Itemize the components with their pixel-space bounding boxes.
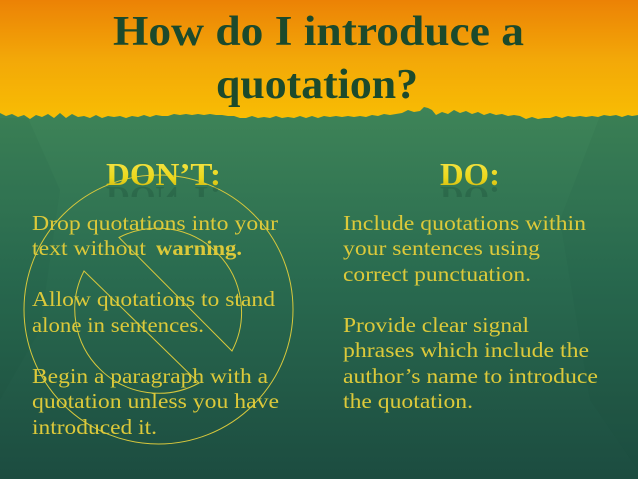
text block: do list: author’s name to introduce xyxy=(343,364,598,388)
text block: do list: the quotation. xyxy=(343,389,473,413)
text block: don't list: Drop quotations into your xyxy=(32,211,278,235)
title xyxy=(113,9,524,108)
title: quotation? xyxy=(216,62,418,108)
background light wedges xyxy=(0,116,638,470)
text block: don't list: Begin a paragraph with a xyxy=(32,364,269,388)
text block: do list: your sentences using xyxy=(343,236,541,260)
orange title band with torn edge xyxy=(0,0,638,119)
text block: do list: Provide clear signal xyxy=(343,313,529,337)
text block: do list xyxy=(343,211,598,413)
heading: do: DO: xyxy=(440,156,500,192)
text block: don't list: quotation unless you have xyxy=(32,389,279,413)
heading reflections xyxy=(106,187,497,197)
text block: do list: correct punctuation. xyxy=(343,262,531,286)
text block: don't list: introduced it. xyxy=(32,415,157,439)
text block: don't list: alone in sentences. xyxy=(32,313,204,337)
text block: don't list: Allow quotations to stand xyxy=(32,287,276,311)
text block: don't list xyxy=(32,211,279,439)
text block: do list: Include quotations within xyxy=(343,211,587,235)
icon: prohibition sign behind don't list xyxy=(24,175,293,444)
heading reflections: DO: xyxy=(440,180,500,216)
text block: don't list: text without xyxy=(32,236,146,260)
title: How do I introduce a xyxy=(113,9,524,55)
text block: do list: phrases which include the xyxy=(343,338,589,362)
heading: don't: DON’T: xyxy=(106,156,221,192)
text block: don't list: warning. xyxy=(156,236,242,260)
green background xyxy=(0,100,638,479)
heading reflections: DON’T: xyxy=(106,180,221,216)
